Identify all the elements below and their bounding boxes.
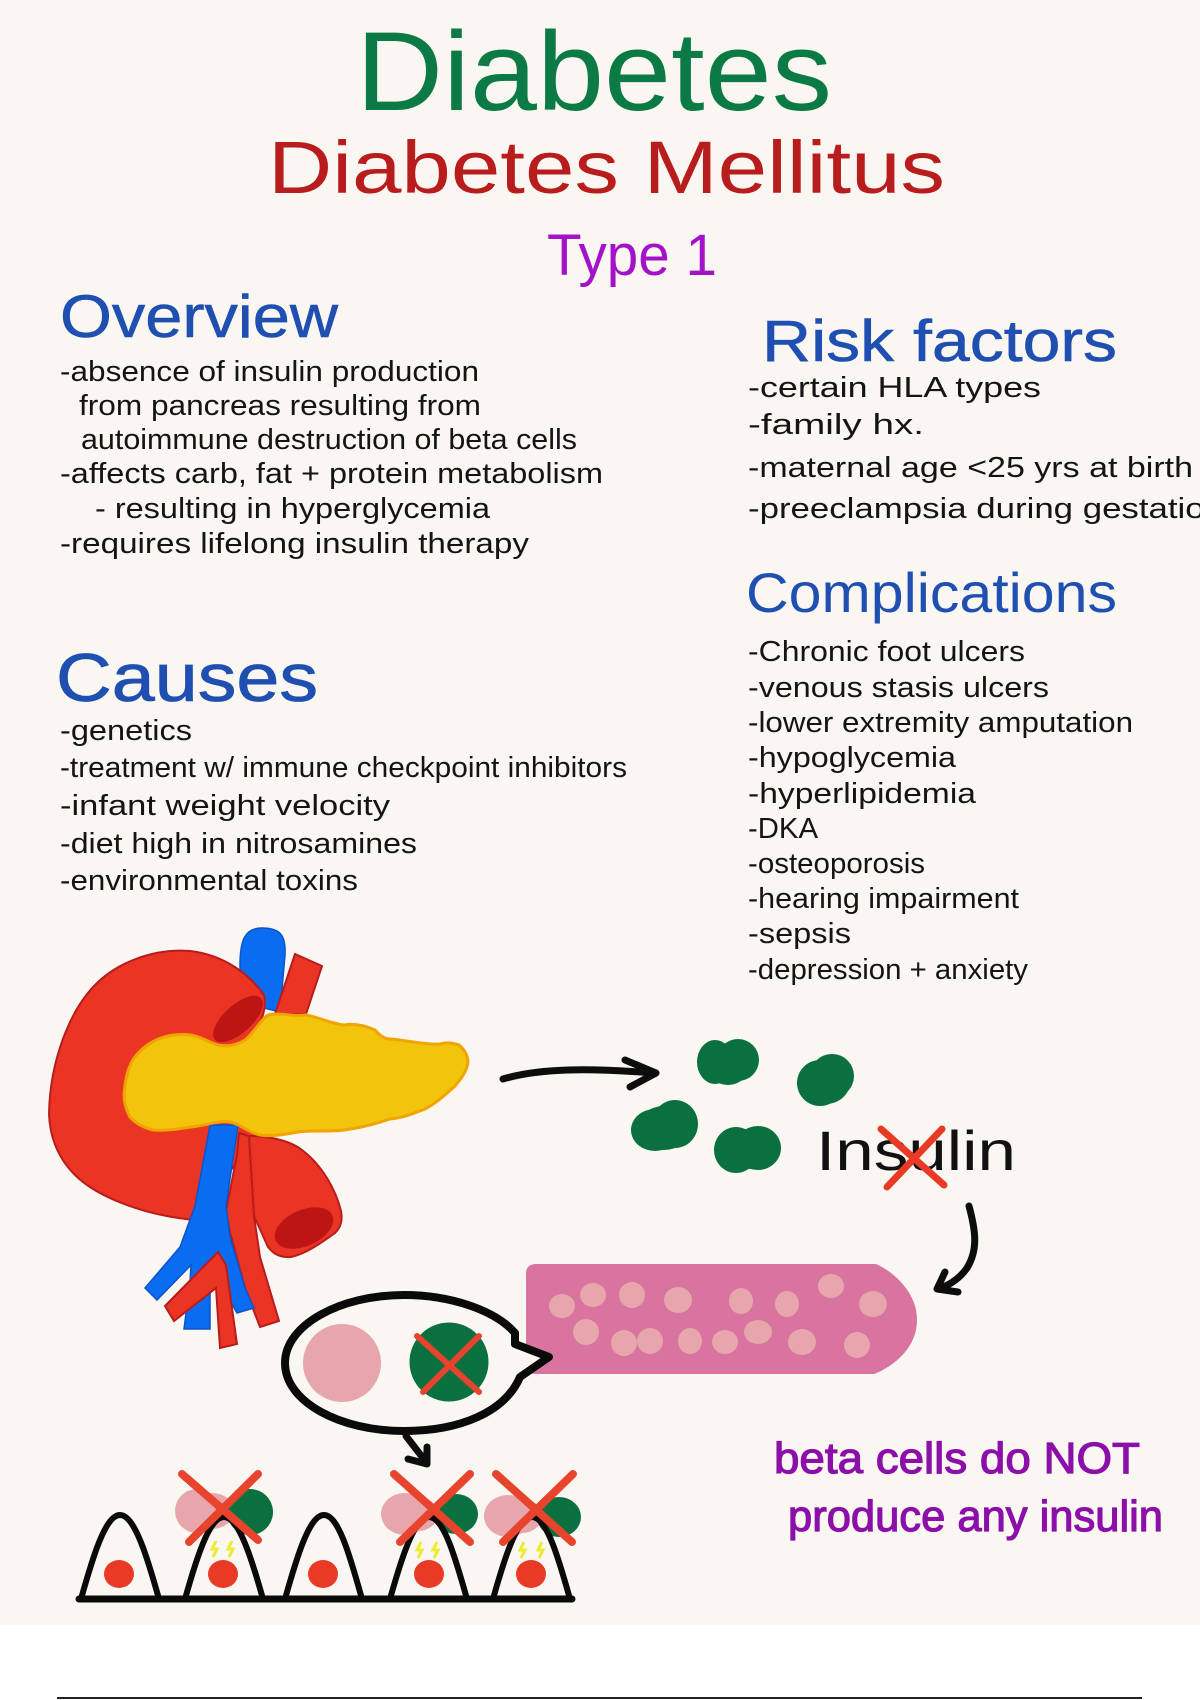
complications list: -sepsis (748, 918, 851, 950)
panel: overview (60, 283, 603, 560)
complications list: -hypoglycemia (748, 742, 957, 774)
causes list: -infant weight velocity (60, 790, 391, 822)
callout: beta cells note: produce any insulin (788, 1492, 1163, 1541)
risk factors list: -certain HLA types (748, 372, 1041, 404)
complications list: -lower extremity amputation (748, 707, 1133, 739)
complications list: -hearing impairment (748, 883, 1019, 915)
overview text: -requires lifelong insulin therapy (60, 528, 530, 560)
heading: risk factors: Risk factors (762, 309, 1117, 374)
risk factors list: -family hx. (748, 409, 924, 441)
causes list: -treatment w/ immune checkpoint inhibitors (60, 752, 627, 784)
complications list: -DKA (748, 813, 819, 845)
callout: beta cells note: beta cells do NOT (774, 1434, 1140, 1483)
arrow: pancreas to insulin (503, 1060, 656, 1087)
arrow: insulin to capillary (937, 1206, 975, 1292)
subtitle: Type 1: Type 1 (547, 223, 717, 288)
label: insulin crossed out: Insulin (816, 1119, 1016, 1182)
illustration: pancreas and duodenum (49, 928, 468, 1348)
overview text: autoimmune destruction of beta cells (81, 424, 577, 456)
arrow: bubble to islet cells (406, 1436, 427, 1464)
overview text: - resulting in hyperglycemia (95, 493, 491, 525)
risk factors list (748, 372, 1200, 525)
overview text: -affects carb, fat + protein metabolism (60, 458, 603, 490)
subtitle: Diabetes Mellitus: Diabetes Mellitus (268, 126, 945, 209)
callout bubble: zoomed cells (285, 1295, 549, 1431)
vein: upper blue (240, 928, 285, 1012)
heading: overview: Overview (60, 283, 339, 350)
heading: causes: Causes (56, 640, 318, 716)
cell 3 (285, 1515, 362, 1599)
causes list: -environmental toxins (60, 865, 358, 897)
artery: lower red (226, 1133, 279, 1327)
basement line (79, 1596, 572, 1602)
complications list: -venous stasis ulcers (748, 672, 1049, 704)
green cell crossed out (410, 1322, 488, 1402)
overview text (60, 356, 603, 560)
causes list (60, 715, 627, 897)
overview text: from pancreas resulting from (79, 390, 481, 422)
causes list: -genetics (60, 715, 192, 747)
title: Diabetes (356, 9, 832, 134)
illustration: islet cells (79, 1474, 581, 1599)
duodenum (49, 951, 265, 1220)
overview text: -absence of insulin production (60, 356, 479, 388)
cell 2 destroyed (175, 1474, 273, 1599)
cell 4 destroyed (381, 1474, 478, 1599)
capillary with pink cells (526, 1264, 917, 1374)
cell 5 destroyed (484, 1474, 581, 1599)
panel: risk factors (748, 309, 1200, 525)
duodenum opening top (206, 988, 270, 1050)
cell 1 (81, 1515, 159, 1599)
panel: complications (746, 561, 1133, 986)
complications list: -depression + anxiety (748, 954, 1029, 986)
artery: lower Y (165, 1252, 237, 1348)
duodenum opening bottom (268, 1199, 340, 1257)
risk factors list: -maternal age <25 yrs at birth (748, 452, 1193, 484)
artery: upper red (275, 954, 322, 1014)
icon: absent insulin granules (631, 1039, 854, 1173)
callout: beta cells note (774, 1434, 1163, 1541)
complications list: -osteoporosis (748, 848, 925, 880)
pink cell (303, 1324, 381, 1402)
complications list (748, 636, 1133, 986)
causes list: -diet high in nitrosamines (60, 828, 417, 860)
risk factors list: -preeclampsia during gestation (748, 493, 1200, 525)
vein: lower blue (145, 1125, 254, 1329)
complications list: -Chronic foot ulcers (748, 636, 1025, 668)
duodenum lower lobe (249, 1136, 342, 1257)
complications list: -hyperlipidemia (748, 778, 977, 810)
pancreas (124, 1014, 468, 1136)
heading: complications: Complications (746, 561, 1117, 624)
panel: causes (56, 640, 627, 897)
